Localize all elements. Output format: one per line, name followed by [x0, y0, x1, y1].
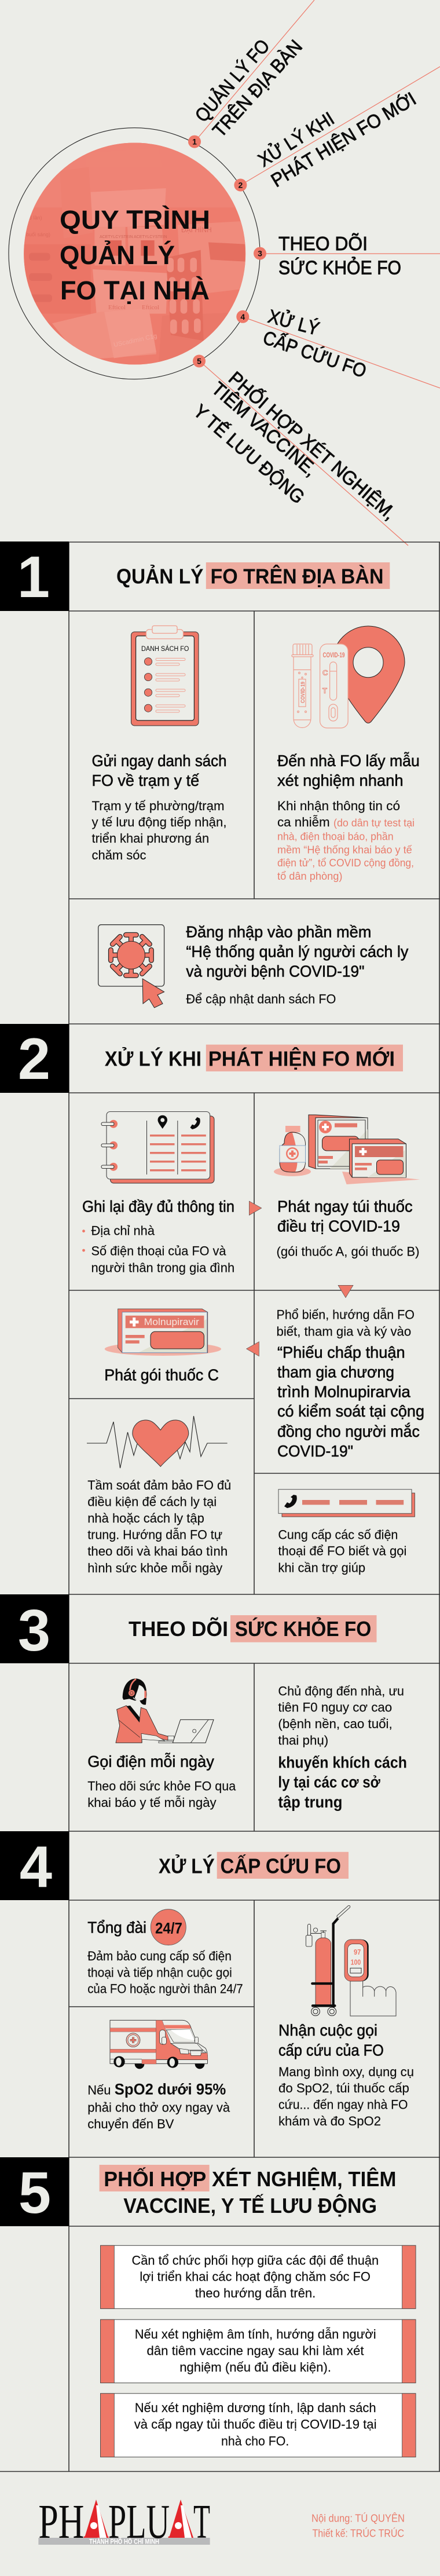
label: step 3 [278, 233, 401, 279]
arrow: right [249, 1201, 262, 1215]
panel: health screening [87, 1416, 231, 1575]
section 4 heading: CẤP CỨU FO [220, 1853, 341, 1878]
text: record information [82, 1197, 234, 1275]
text: issue medicine pack C: Phát gói thuốc C [104, 1366, 219, 1384]
text: provide phone numbers: Cung cấp các số điện [278, 1527, 398, 1542]
connector lines [195, 0, 440, 546]
callout box 2: dân tiêm vaccine ngay sau khi làm xét [147, 2343, 364, 2358]
grid lines [0, 542, 440, 2472]
text: home rapid test: ca nhiễm [277, 815, 330, 829]
section 2 heading: XỬ LÝ KHI [105, 1046, 201, 1071]
panel: issue medicine pack C [104, 1309, 221, 1384]
text: send F0 list [91, 752, 227, 862]
section 4 heading [159, 1852, 349, 1879]
text: issue medicine bag: Phát ngay túi thuốc [277, 1197, 413, 1215]
photo small print [26, 215, 212, 349]
icon: notebook [101, 1112, 214, 1183]
icon: clipboard with list [131, 625, 199, 726]
logo: Pháp Luật: PH [38, 2495, 84, 2549]
callout box 3: và cấp ngay tủi thuốc điều trị COVID-19 tại [134, 2417, 376, 2432]
text: receive emergency call: cứu... đến ngay nhà FO [278, 2098, 408, 2112]
text: daily calls: Gọi điện mỗi ngày [87, 1752, 214, 1770]
label: step 3: SỨC KHỎE FO [278, 257, 401, 279]
icon: heart with pulse line [87, 1416, 228, 1468]
text: record information: người thân trong gia đình [91, 1261, 234, 1275]
panel: SpO2 below 95 percent [87, 2020, 230, 2131]
text: hotline detail: của FO hoặc người thân 24/7 [87, 1982, 243, 1996]
panel: encourage concentrated isolation: tập trung [278, 1793, 342, 1811]
text: receive emergency call: Mang bình oxy, dụng cụ [278, 2065, 414, 2079]
text: record information: Ghi lại đầy đủ thông tin [82, 1197, 234, 1215]
label: step 1: TRÊN ĐỊA BÀN [208, 35, 306, 141]
text: issue medicine bag: điều trị COVID-19 [277, 1217, 400, 1235]
panel: daily calls [87, 1678, 236, 1810]
number block 2: 2 [18, 1027, 50, 1092]
section 3 heading [129, 1615, 376, 1642]
callout box 3 [101, 2394, 416, 2457]
number block 4: 4 [20, 1835, 52, 1900]
text: health screening: hình sức khỏe mỗi ngày [87, 1561, 223, 1575]
section 5 heading [100, 2165, 396, 2218]
panel: Molnupiravir consent form: có kiểm soát tại cộng [277, 1402, 424, 1420]
panel: encourage concentrated isolation: khuyến khích cách [278, 1754, 407, 1772]
icon: Molnupiravir box: Molnupiravir [144, 1316, 199, 1327]
callout box 1: theo hướng dẫn trên. [195, 2286, 316, 2300]
text: log in to software: “Hệ thống quản lý người cách ly [186, 942, 408, 960]
panel: Molnupiravir consent form: Phổ biến, hướng dẫn FO [277, 1308, 415, 1322]
icon: test tube [292, 644, 313, 727]
text: home rapid test: nhà, điện thoại báo, phần [277, 830, 394, 843]
icon: woman with headset at laptop [116, 1678, 214, 1743]
text: health screening [87, 1478, 231, 1575]
text: home rapid test: Đến nhà FO lấy mẫu [277, 752, 420, 770]
main title: QUY TRÌNH [60, 205, 210, 235]
text: receive emergency call: đo SpO2, túi thuốc cấp [278, 2081, 409, 2095]
step number markers [188, 136, 266, 367]
label: step 5: Y TẾ LƯU ĐỘNG [189, 400, 309, 508]
text: daily calls: khai báo y tế mỗi ngày [87, 1795, 217, 1810]
text: SpO2 below 95 percent [87, 2081, 230, 2131]
text: health screening: trung. Hướng dẫn FO tự [87, 1528, 222, 1542]
panel: log in to software [98, 923, 408, 1008]
text: home rapid test: Khi nhận thông tin có [277, 799, 400, 813]
panel: Molnupiravir consent form: “Phiếu chấp thuận [277, 1343, 405, 1361]
panel: record information [82, 1112, 234, 1275]
number block 1 [0, 541, 69, 611]
panel: provide phone numbers [278, 1490, 415, 1575]
section 5 heading: VACCINE, Y TẾ LƯU ĐỘNG [123, 2193, 377, 2218]
callout box 1 [101, 2245, 416, 2308]
label: step 4: XỬ LÝ [266, 305, 322, 339]
panel: send F0 list [91, 625, 227, 862]
number block 3: 3 [18, 1598, 50, 1663]
step number markers: 1 [192, 137, 197, 147]
icon: map pin [332, 626, 405, 723]
icon: ambulance [110, 2020, 208, 2069]
logo: Pháp Luật: T [193, 2495, 210, 2549]
label: step 2: PHÁT HIỆN FO MỚI [267, 87, 420, 191]
text: home rapid test: điện tử”, tổ COVID cộng đồng, [277, 857, 414, 869]
logo: Pháp Luật: PLU [108, 2495, 170, 2549]
section 1 heading: FO TRÊN ĐỊA BÀN [211, 564, 383, 588]
panel: encourage concentrated isolation: Chủ động đến nhà, ưu [278, 1684, 404, 1698]
label: step 5: PHỐI HỢP XÉT NGHIỆM, [225, 367, 401, 524]
arrow: down [338, 1285, 353, 1298]
text: send F0 list: Trạm y tế phường/trạm [91, 799, 225, 813]
text: issue medicine bag [277, 1197, 419, 1258]
icon: rapid test cassette: C [322, 668, 328, 677]
panel: encourage concentrated isolation: thai phụ) [278, 1733, 328, 1748]
panel: Molnupiravir consent form [277, 1308, 424, 1460]
text: provide phone numbers: thoại để FO biết và gọi [278, 1544, 406, 1558]
photo small print: buổi sáng) [26, 232, 50, 237]
text: receive emergency call: khám và đo SpO2 [278, 2114, 381, 2128]
callout box 2 [101, 2319, 416, 2383]
icon: rapid test cassette: T [322, 686, 327, 695]
badge: 24/7: 24/7 [155, 1919, 182, 1937]
panel: Molnupiravir consent form: tham gia chương [277, 1363, 394, 1381]
hero: process overview diagram [9, 0, 440, 546]
panel: Molnupiravir consent form: COVID-19" [277, 1442, 353, 1460]
section 4 heading: XỬ LÝ [159, 1853, 215, 1878]
panel: issue medicine bag [274, 1115, 420, 1258]
text: health screening: nhà hoặc cách ly tập [87, 1511, 204, 1525]
icon: Molnupiravir box [105, 1309, 221, 1356]
text: log in to software: Đăng nhập vào phần mềm [186, 923, 371, 941]
step number markers: 3 [258, 249, 262, 258]
text: send F0 list: chăm sóc [91, 848, 146, 862]
credits: Nội dung: TÚ QUYÊN [311, 2512, 405, 2524]
credits [311, 2512, 405, 2539]
outer ring [9, 128, 260, 379]
text: receive emergency call: Nhận cuộc gọi [278, 2021, 377, 2039]
icon: oxygen cylinder and pulse oximeter: 97 [354, 1948, 361, 1956]
icon: medicine bottle and boxes [274, 1115, 420, 1184]
photo small print: Efticol [108, 304, 126, 311]
label: step 5: TIÊM VACCINE, [208, 378, 321, 480]
main title: QUẢN LÝ [60, 240, 175, 270]
text: log in to software: và người bệnh COVID-19" [186, 963, 364, 980]
logo: Pháp Luật [38, 2495, 210, 2549]
text: receive emergency call [278, 2021, 414, 2128]
icon: test tube: COVID-19 [300, 682, 306, 703]
icon: virus button with cursor [98, 925, 164, 1008]
panel: receive emergency call [278, 1907, 414, 2128]
text: hotline detail [87, 1949, 243, 1996]
text: health screening: theo dõi và khai báo tình [87, 1544, 228, 1558]
number block 5: 5 [19, 2161, 51, 2226]
text: provide phone numbers: khi cần trợ giúp [278, 1560, 365, 1575]
text: record information: Địa chỉ nhà [91, 1223, 155, 1238]
text: home rapid test: (do dân tự test tại [333, 817, 415, 829]
section 1 heading: QUẢN LÝ [116, 565, 203, 588]
logo: Pháp Luật: A [83, 2495, 109, 2549]
main title: FO TẠI NHÀ [60, 276, 210, 305]
number block 3 [0, 1594, 69, 1663]
photo small print: Efticol [142, 304, 159, 311]
section 5 heading: XÉT NGHIỆM, TIÊM [212, 2167, 396, 2191]
label: step 4 [261, 305, 369, 382]
number block 5 [0, 2157, 69, 2226]
callout box 3: nhà cho FO. [221, 2434, 289, 2448]
panel: Molnupiravir consent form: đồng cho người mắc [277, 1422, 420, 1440]
step number markers: 5 [197, 357, 201, 366]
text: record information: Số điện thoại của FO và [91, 1244, 226, 1258]
text: home rapid test: xét nghiệm nhanh [277, 771, 404, 789]
photo circle: medicine packs tinted salmon [23, 142, 249, 368]
icon: oxygen cylinder and pulse oximeter [306, 1907, 396, 2016]
text: send F0 list: y tế lưu động tiếp nhận, [91, 815, 227, 829]
panel: home rapid test [277, 626, 420, 882]
photo small print: ACETYLCYSTEIN [134, 235, 167, 239]
text: log in to software [186, 923, 408, 1006]
section 2 heading [105, 1045, 403, 1071]
icon: rapid test cassette: COVID-19 [323, 652, 345, 659]
text: SpO2 below 95 percent: chuyển đến BV [87, 2117, 174, 2131]
text: hotline detail: Đảm bảo cung cấp số điện [87, 1949, 232, 1963]
arrow: left [247, 1342, 259, 1356]
text: issue medicine bag: (gói thuốc A, gói thuốc B) [277, 1244, 419, 1258]
label: step 3: THEO DÕI [278, 233, 368, 254]
panel: encourage concentrated isolation: tiên F0 nguy cơ cao [278, 1700, 392, 1715]
section 3 heading: SỨC KHỎE FO [235, 1616, 371, 1641]
credits: Thiết kế: TRÚC TRÚC [313, 2527, 404, 2539]
photo small print: ACETYLCYSTEIN [100, 235, 133, 239]
text: health screening: Tầm soát đảm bảo FO đủ [87, 1478, 231, 1492]
text: home rapid test: mềm “Hệ thống khai báo y tế [277, 843, 412, 855]
main title [60, 205, 210, 305]
icon: clipboard with list: DANH SÁCH FO [141, 645, 189, 653]
section 2 heading: PHÁT HIỆN FO MỚI [208, 1046, 395, 1071]
panel: encourage concentrated isolation: ly tại các cơ sở [278, 1773, 380, 1791]
text: send F0 list: triển khai phương án [91, 831, 209, 846]
text: SpO2 below 95 percent: SpO2 dưới 95% [115, 2081, 226, 2098]
text: home rapid test: tổ dân phòng) [277, 870, 343, 882]
badge: 24/7 [151, 1909, 186, 1945]
label: step 4: CẤP CỨU FO [261, 327, 369, 382]
icon: phone number bar [278, 1490, 415, 1517]
text: send F0 list: FO về trạm y tế [91, 771, 199, 789]
icon: rapid test cassette [320, 644, 348, 728]
panel: Molnupiravir consent form: trình Molnupirarvia [277, 1383, 410, 1401]
callout box 2: Nếu xét nghiệm âm tính, hướng dẫn người [135, 2327, 376, 2341]
text: health screening: điều kiện để cách ly tại [87, 1494, 217, 1509]
panel: encourage concentrated isolation [278, 1684, 407, 1811]
text: SpO2 below 95 percent: Nếu [87, 2083, 111, 2098]
panel: 24/7 hotline [87, 1909, 243, 1996]
callout box 2: nghiệm (nếu đủ điều kiện). [179, 2360, 331, 2374]
text: send F0 list: Gửi ngay danh sách [91, 752, 227, 770]
number block 4 [0, 1831, 69, 1900]
panel: Molnupiravir consent form: biết, tham gia và ký vào [277, 1324, 411, 1339]
text: provide phone numbers [278, 1527, 406, 1575]
section 1 heading [116, 562, 390, 589]
text: log in to software: Để cập nhật danh sách FO [186, 991, 336, 1006]
text: SpO2 below 95 percent: phải cho thở oxy ngay và [87, 2101, 230, 2115]
text: daily calls [87, 1752, 236, 1810]
text: hotline detail: thoại và tiếp nhận cuộc gọi [87, 1965, 232, 1979]
callout box 1: Cần tổ chức phối hợp giữa các đội để thuận [132, 2253, 379, 2268]
icon: oxygen cylinder and pulse oximeter: 100 [351, 1958, 361, 1966]
text: home rapid test [277, 752, 420, 882]
step number markers: 4 [240, 312, 245, 321]
icon: pin hole [353, 647, 383, 678]
panel: 24/7 hotline: Tổng đài [87, 1918, 146, 1936]
panel: encourage concentrated isolation: (bệnh nền, cao tuổi, [278, 1717, 393, 1731]
photo small print: 3 lần) [29, 215, 42, 221]
label: step 2: XỬ LÝ KHI [254, 108, 338, 171]
step number markers: 2 [239, 181, 243, 190]
logo: Pháp Luật: THÀNH PHỐ HỒ CHÍ MINH [89, 2537, 159, 2545]
logo: Pháp Luật: A [168, 2495, 193, 2549]
callout box 3: Nếu xét nghiệm dương tính, lập danh sách [135, 2401, 376, 2415]
number block 1: 1 [17, 545, 50, 610]
photo small print: UScadimin C1g [113, 332, 157, 349]
section 5 heading: PHỐI HỢP [104, 2167, 206, 2191]
photo small print: ĐẠI HÌNH [181, 225, 212, 234]
text: receive emergency call: cấp cứu của FO [278, 2041, 384, 2059]
number block 2 [0, 1024, 69, 1093]
label: step 1: QUẢN LÝ FO [190, 35, 274, 126]
callout box 1: lợi triển khai các hoạt động chăm sóc FO [140, 2269, 371, 2284]
text: daily calls: Theo dõi sức khỏe FO qua [87, 1779, 236, 1794]
section 3 heading: THEO DÕI [129, 1616, 228, 1641]
